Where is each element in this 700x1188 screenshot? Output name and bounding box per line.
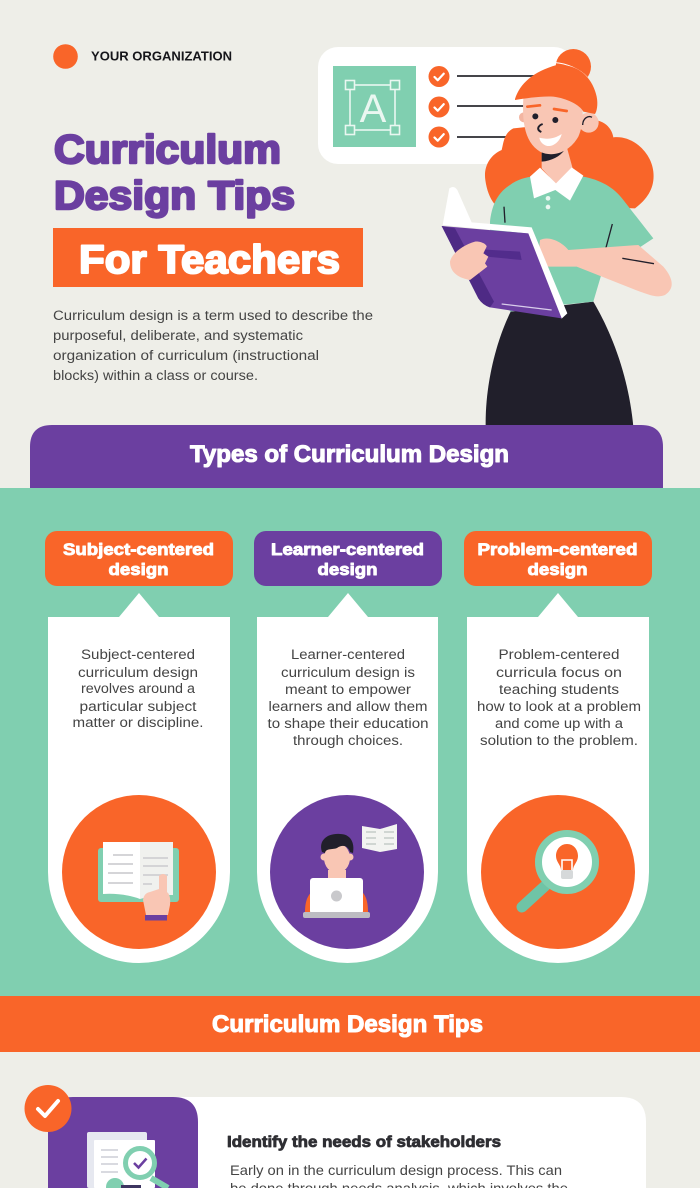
panel: problem-centered design: solution to the problem. [480,733,638,748]
panel: problem-centered design: curricula focus on [496,665,622,680]
panel: learner-centered design: through choices. [293,733,403,748]
panel: problem-centered design [464,531,652,963]
panel: problem-centered design: and come up with a [495,716,624,731]
panel: problem-centered design: how to look at a problem [477,699,641,714]
intro paragraph: organization of curriculum (instructional [53,348,319,363]
section heading: curriculum design tips [0,996,700,1052]
section heading: types of curriculum design: Types of Curriculum Design [190,441,509,468]
panel: subject-centered design: Subject-centered [63,540,214,559]
panel: learner-centered design: meant to empower [285,682,412,697]
icon: open book with pointing hand [98,842,179,920]
panel: teal background [0,488,700,996]
illustration: teacher holding a book [442,49,672,427]
panel: subject-centered design: design [108,560,168,579]
tip heading: Identify the needs of stakeholders [227,1134,501,1151]
panel: problem-centered design: Problem-centered [498,647,620,662]
panel: subject-centered design: revolves around a [81,681,196,696]
organization logo and name: YOUR ORGANIZATION [91,48,232,64]
panel: tip one [24,1085,646,1188]
panel: subject-centered design: matter or discipline. [72,715,204,730]
icon: document review [87,1132,168,1188]
tip text [230,1162,568,1188]
panel: learner-centered design [254,531,442,963]
panel: learner-centered design: design [318,560,378,579]
panel: subject-centered design: particular subject [80,699,197,714]
panel: problem-centered design: teaching students [499,682,619,697]
panel: problem-centered design: Problem-centered [478,540,638,559]
organization logo and name [53,44,232,69]
panel: learner-centered design: Learner-centered [271,540,424,559]
section heading: curriculum design tips: Curriculum Design Tips [212,1011,483,1038]
illustration: lesson plan bubble: A [360,87,387,131]
panel: problem-centered design: design [528,560,588,579]
section heading: types of curriculum design [30,425,663,488]
icon: learner with laptop and book [303,824,397,918]
title: Design Tips [54,174,295,218]
intro paragraph: Curriculum design is a term used to describe the [53,308,373,323]
subtitle banner [53,228,363,287]
tip text: Early on in the curriculum design process. This can [230,1162,562,1178]
panel: learner-centered design: learners and allow them [268,699,428,714]
icon: check badge [24,1085,72,1132]
illustration: lesson plan bubble [318,47,574,164]
subtitle banner: For Teachers [79,238,340,282]
icon: magnifier with lightbulb [522,834,596,907]
panel: learner-centered design: curriculum design is [281,665,415,680]
title: Curriculum [54,128,281,172]
intro paragraph: blocks) within a class or course. [53,368,258,383]
title [54,128,295,218]
intro paragraph [53,308,373,383]
panel: learner-centered design: Learner-centered [291,647,405,662]
panel: learner-centered design: to shape their education [268,716,428,731]
panel: subject-centered design: Subject-centered [81,647,195,662]
panel: subject-centered design [45,531,233,963]
panel: subject-centered design: curriculum design [78,665,198,680]
intro paragraph: purposeful, deliberate, and systematic [53,328,303,343]
